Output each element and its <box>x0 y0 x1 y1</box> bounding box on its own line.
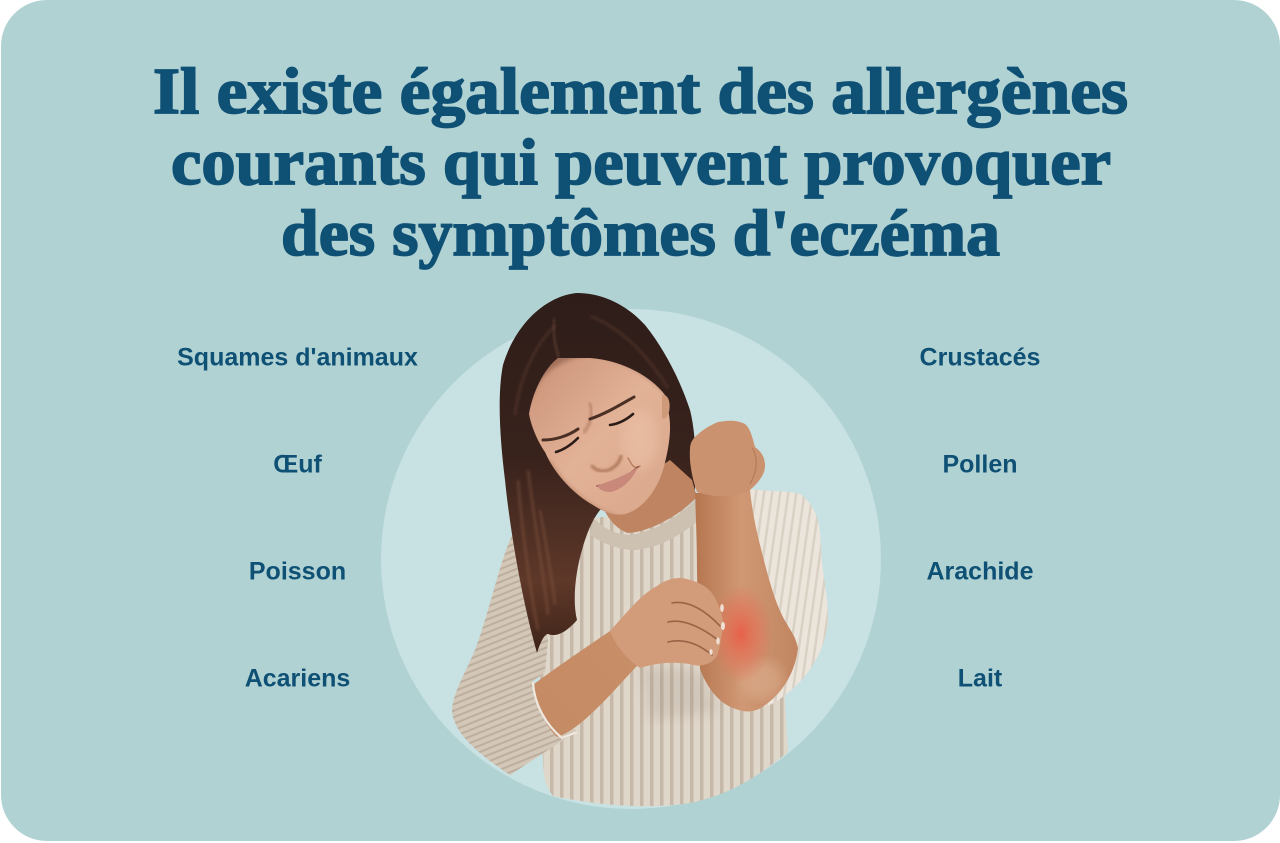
photo: woman scratching her arm <box>452 293 828 806</box>
face <box>529 358 670 515</box>
brows, eyes, nose and mouth <box>543 397 640 486</box>
left allergen list: Œuf <box>273 450 322 478</box>
title: des symptômes d'eczéma <box>281 197 1000 270</box>
background circle <box>381 309 881 809</box>
torso shadow <box>640 667 720 720</box>
hair highlights <box>515 316 668 630</box>
right sleeve <box>730 488 828 706</box>
sweater torso <box>513 500 788 806</box>
right allergen list: Arachide <box>927 558 1034 586</box>
fist <box>690 421 765 496</box>
knuckle shading <box>750 448 756 484</box>
left allergen list: Poisson <box>249 558 346 586</box>
lips <box>597 467 638 492</box>
right allergen list: Crustacés <box>920 344 1040 372</box>
title <box>153 55 1128 270</box>
left allergen list <box>177 344 418 692</box>
elbow light and rash <box>718 592 785 700</box>
finger creases and nails <box>668 602 725 655</box>
ear <box>662 395 670 419</box>
right allergen list: Lait <box>958 664 1003 692</box>
hair parting <box>553 318 559 358</box>
title: courants qui peuvent provoquer <box>171 126 1111 199</box>
hair <box>500 293 696 653</box>
left sleeve <box>452 533 577 775</box>
title: Il existe également des allergènes <box>153 55 1128 128</box>
sweater cuff <box>533 682 577 738</box>
jaw shadow <box>550 460 618 514</box>
left allergen list: Squames d'animaux <box>177 344 418 372</box>
hair shadow on forehead <box>535 358 664 395</box>
collar <box>590 500 697 550</box>
left allergen list: Acariens <box>245 664 350 692</box>
neck <box>602 460 697 533</box>
right allergen list: Pollen <box>942 450 1018 478</box>
right allergen list <box>920 344 1040 692</box>
left forearm <box>534 610 655 737</box>
right forearm <box>695 490 798 711</box>
cheek light <box>625 415 656 466</box>
infographic artwork <box>154 66 1128 809</box>
left hand <box>610 578 723 668</box>
